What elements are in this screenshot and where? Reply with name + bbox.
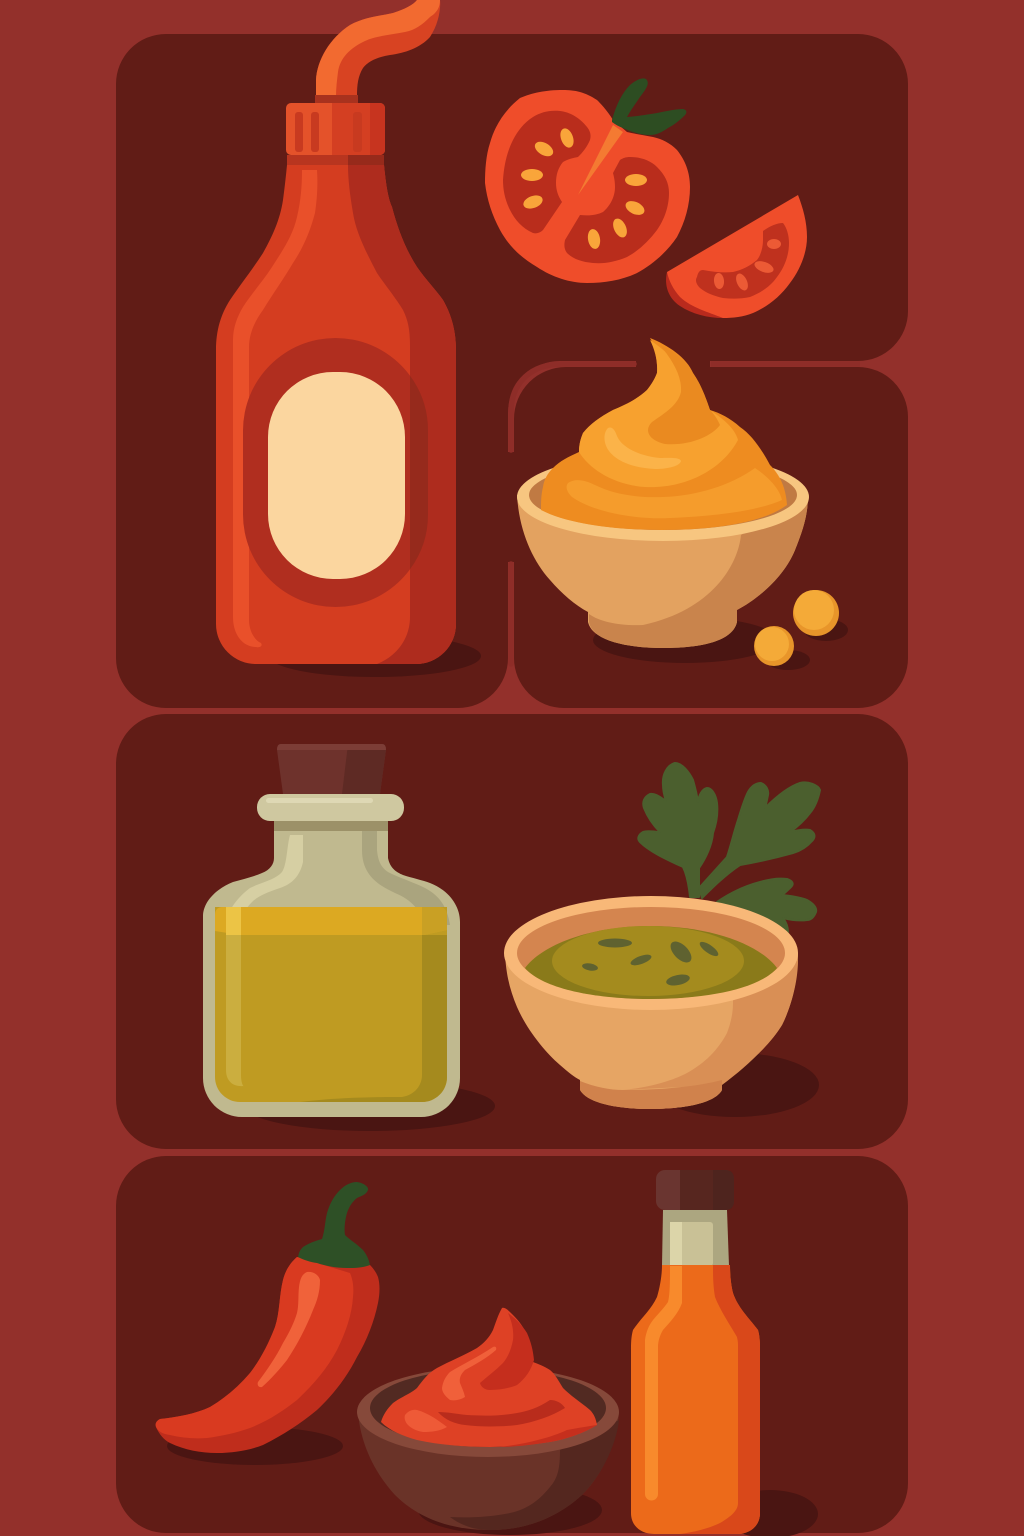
tomato skin <box>485 90 690 283</box>
hot sauce shade <box>680 1265 760 1534</box>
jar shadow <box>245 1081 495 1131</box>
pesto flecks <box>582 938 720 987</box>
pesto <box>525 926 777 999</box>
paste bowl shadow <box>418 1485 602 1535</box>
hot sauce cap <box>656 1170 734 1210</box>
paste tip shade <box>480 1313 534 1390</box>
chili highlight <box>258 1272 320 1387</box>
paste highlight lower <box>405 1410 447 1432</box>
oil <box>215 907 447 1102</box>
mustard upper tier <box>579 340 738 487</box>
mustard highlight <box>604 427 681 469</box>
cork <box>277 744 386 794</box>
ketchup bottle <box>216 0 481 677</box>
pesto bowl <box>504 763 820 1117</box>
seeds <box>521 127 647 250</box>
olive oil jar <box>203 744 495 1131</box>
paste bowl inner <box>370 1369 606 1447</box>
cap base <box>286 103 385 155</box>
squirt highlight <box>316 0 440 96</box>
pesto bowl rim <box>504 896 798 1010</box>
hot sauce bottle <box>631 1170 818 1536</box>
oil surface <box>215 907 447 935</box>
bowl shade <box>589 495 808 648</box>
bowl shadow <box>593 617 777 663</box>
bowl body <box>517 495 808 648</box>
pesto bowl shadow <box>651 1053 819 1117</box>
flesh right <box>564 157 669 263</box>
hot sauce highlight <box>645 1266 682 1500</box>
hot sauce shadow <box>722 1490 818 1536</box>
oil highlight <box>226 907 244 1086</box>
paste lower shade <box>500 1425 597 1447</box>
pesto centre <box>552 926 744 996</box>
ketchup squirt <box>316 0 440 96</box>
panel accent lines <box>511 364 860 664</box>
bottle shadow <box>269 635 481 677</box>
bottle right shade <box>348 155 456 664</box>
pesto bowl shade <box>623 960 798 1090</box>
ring overlap <box>410 376 428 569</box>
seed shadows <box>766 619 848 670</box>
paste bowl body <box>358 1412 619 1530</box>
wedge flesh <box>696 223 789 299</box>
hot sauce body <box>631 1265 760 1534</box>
wedge dark skin <box>666 272 740 318</box>
panel: olive oil and pesto <box>116 714 908 1149</box>
chili paste bowl <box>357 1308 619 1535</box>
panel: mustard <box>514 367 908 708</box>
neck shadow <box>274 820 388 831</box>
label ring <box>243 338 428 607</box>
lip highlight <box>266 798 373 803</box>
wedge skin <box>667 195 807 318</box>
mustard seed large <box>793 590 839 636</box>
bottle left highlight <box>233 170 317 647</box>
parsley low leaf <box>717 879 816 932</box>
panel joins <box>504 357 710 562</box>
oil highlight top <box>226 907 241 935</box>
mustard mound <box>541 338 787 530</box>
tomato stem <box>612 78 686 135</box>
parsley left leaf <box>638 763 717 897</box>
tomato half <box>485 78 690 283</box>
paste highlight upper <box>442 1347 496 1400</box>
mustard seed small <box>754 626 794 666</box>
bowl rim <box>517 453 809 541</box>
paste bowl shade <box>450 1420 619 1530</box>
tomato wedge <box>666 195 807 318</box>
bowl inner <box>529 460 797 530</box>
jar glass <box>203 820 460 1117</box>
parsley right leaf <box>699 782 820 898</box>
paste band <box>438 1400 565 1426</box>
core spike <box>578 125 623 195</box>
left highlight <box>226 835 303 925</box>
parsley <box>638 763 820 932</box>
paste bowl rim <box>357 1367 619 1457</box>
pesto bowl foot <box>580 1080 722 1109</box>
paste <box>381 1308 597 1447</box>
cap middle <box>332 103 370 155</box>
mustard lower band <box>567 468 782 518</box>
chili shadow <box>167 1427 343 1465</box>
jar lip <box>257 794 404 821</box>
hot sauce neck <box>662 1210 729 1266</box>
cap <box>286 103 385 155</box>
panel: ketchup and tomato <box>116 34 908 708</box>
cap ribs <box>295 112 362 152</box>
flesh left <box>503 111 591 233</box>
oil right shade <box>300 935 447 1102</box>
mustard tip shade <box>648 345 720 444</box>
panel: chili <box>116 1156 908 1533</box>
chili body <box>156 1257 380 1453</box>
pesto bowl body <box>505 953 798 1109</box>
chili pepper <box>156 1182 380 1465</box>
cap right <box>370 103 385 155</box>
neck right shade <box>362 830 450 925</box>
oil surface right <box>422 907 447 935</box>
chili light side <box>156 1257 353 1438</box>
mustard bowl <box>517 338 848 670</box>
bottle body <box>216 155 456 664</box>
label <box>268 372 405 579</box>
neck shadow <box>315 95 358 104</box>
wedge seeds <box>713 239 781 292</box>
neck shadow band <box>287 155 348 165</box>
pesto bowl inner <box>517 907 785 999</box>
chili cap and stem <box>298 1182 370 1268</box>
